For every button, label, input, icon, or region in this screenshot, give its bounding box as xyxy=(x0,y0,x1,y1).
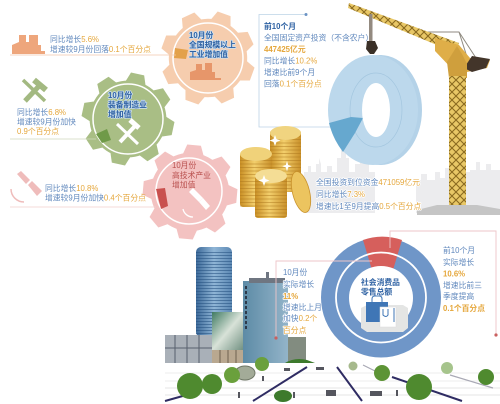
gear: equipment (green) xyxy=(73,64,183,174)
heading: equipment: 10月份 xyxy=(108,90,132,100)
tree xyxy=(478,369,494,385)
heading: industry: 全国规模以上 xyxy=(189,40,236,50)
text: fixed asset investment: 447425亿元 xyxy=(264,44,306,54)
gear: industry (peach) xyxy=(148,0,268,118)
text: equipment stat: 0.9个百分点 xyxy=(17,127,59,136)
text: fixed asset investment: 增速比前9个月 xyxy=(264,67,315,77)
text: monthly retail: 10月份 xyxy=(283,267,307,277)
text: funds in place xyxy=(316,177,421,211)
callout: fixed asset investment xyxy=(259,13,373,127)
callout: monthly retail xyxy=(274,261,372,340)
chart: retail donut xyxy=(321,237,441,358)
icon: factory small xyxy=(190,63,221,80)
tall round tower xyxy=(196,247,232,337)
icon: shopping bags xyxy=(361,296,408,332)
text: ten-month retail: 实际增长 xyxy=(443,257,474,267)
heading: industry: 工业增加值 xyxy=(189,49,228,59)
heading: industry xyxy=(189,30,236,59)
coin stack front xyxy=(255,169,287,218)
text: fixed asset investment: 前10个月 xyxy=(264,21,296,31)
row: industry stat xyxy=(10,34,176,55)
right block xyxy=(243,272,288,363)
text: equipment stat xyxy=(17,107,76,136)
tree xyxy=(224,367,240,383)
plaza and trees xyxy=(165,357,500,402)
tree xyxy=(255,357,269,371)
elliptical plaza feature xyxy=(235,366,255,380)
crane xyxy=(348,3,500,215)
crane base xyxy=(417,205,500,215)
text: ten-month retail xyxy=(443,245,485,313)
tree xyxy=(441,362,453,374)
hedge xyxy=(285,359,315,363)
people xyxy=(238,367,398,398)
tie bars xyxy=(427,32,476,60)
leaning coin xyxy=(288,170,314,214)
text: industry stat: 同比增长5.6% xyxy=(50,34,99,44)
counter jib xyxy=(435,38,490,72)
heading: retail: 社会消费品 xyxy=(361,277,400,287)
icon: tools xyxy=(23,80,46,101)
coin stack back xyxy=(270,126,301,192)
heading: retail xyxy=(361,277,400,296)
coins xyxy=(240,126,314,218)
text: ten-month retail: 季度提高 xyxy=(443,291,474,301)
text: fixed asset investment: 回落0.1个百分点 xyxy=(264,78,322,88)
heading: retail: 零售总额 xyxy=(361,286,392,296)
heading: equipment: 装备制造业 xyxy=(108,100,147,110)
tree xyxy=(202,374,222,394)
text: monthly retail: 加快0.2个 xyxy=(283,313,317,323)
indicator: high tech share xyxy=(156,188,168,209)
buildings xyxy=(165,247,315,363)
text: ten-month retail: 增速比前三 xyxy=(443,280,482,290)
text: ten-month retail: 前10个月 xyxy=(443,245,475,255)
callout: ten-month retail xyxy=(390,231,498,337)
heading: high tech: 10月份 xyxy=(172,160,196,170)
tree xyxy=(374,365,390,381)
road strokes xyxy=(165,367,462,401)
text: monthly retail xyxy=(283,267,322,335)
text: monthly retail: 百分点 xyxy=(283,326,307,335)
text: equipment stat: 同比增长6.8% xyxy=(17,107,66,117)
heading: industry: 10月份 xyxy=(189,30,213,40)
skyline background xyxy=(304,150,500,213)
text: funds in place: 同比增长7.3% xyxy=(316,189,365,199)
indicator: industry share xyxy=(174,48,188,59)
counterweight xyxy=(464,56,490,72)
icon: satellite xyxy=(11,171,42,202)
text: high tech stat xyxy=(45,183,146,202)
text: fixed asset investment: 同比增长10.2% xyxy=(264,56,317,66)
text: fixed asset investment: 全国固定资产投资（不含农户） xyxy=(264,32,373,42)
icon: factory xyxy=(12,35,45,54)
gear: high tech (pink) xyxy=(139,141,241,243)
icon: tools small xyxy=(117,120,139,144)
text: fixed asset investment xyxy=(264,21,373,88)
tower xyxy=(449,76,466,206)
text: monthly retail: 增速比上月 xyxy=(283,302,322,312)
sparkles xyxy=(258,135,292,186)
annex block xyxy=(288,337,306,363)
text: funds in place: 增速比1至9月提高0.5个百分点 xyxy=(316,201,421,211)
text: ten-month retail: 10.6% xyxy=(443,270,465,278)
low left block xyxy=(165,335,213,363)
row: high tech stat xyxy=(10,171,156,207)
heading: high tech: 高技术产业 xyxy=(172,170,211,180)
text: ten-month retail: 0.1个百分点 xyxy=(443,303,485,313)
text: high tech stat: 增速较9月份加快0.4个百分点 xyxy=(45,192,146,202)
text: high tech stat: 同比增长10.8% xyxy=(45,183,98,193)
text: equipment stat: 增速较9月份加快 xyxy=(17,116,76,126)
row: equipment stat xyxy=(10,80,96,139)
heading: equipment: 增加值 xyxy=(108,109,132,119)
tree xyxy=(406,374,432,400)
coin stack left xyxy=(240,147,272,207)
hook xyxy=(366,14,378,54)
text: monthly retail: 实际增长 xyxy=(283,279,314,289)
tower head xyxy=(447,46,467,78)
icon: satellite small xyxy=(183,188,210,217)
text: monthly retail: 11% xyxy=(283,292,298,301)
chart: investment torus xyxy=(328,55,422,165)
text: industry stat xyxy=(50,34,151,54)
donut highlighted sector xyxy=(363,237,402,270)
heading: high tech xyxy=(172,160,211,190)
tree xyxy=(177,373,203,399)
text: funds in place: 全国投资到位资金471059亿元 xyxy=(316,177,420,187)
jib xyxy=(348,3,459,53)
center glass block xyxy=(212,312,244,363)
tree xyxy=(348,362,358,370)
tree xyxy=(274,390,292,402)
heading: equipment xyxy=(108,90,147,119)
heading: high tech: 增加值 xyxy=(172,180,196,190)
indicator: equipment share xyxy=(96,129,111,143)
text: industry stat: 增速较9月份回落0.1个百分点 xyxy=(50,44,151,54)
